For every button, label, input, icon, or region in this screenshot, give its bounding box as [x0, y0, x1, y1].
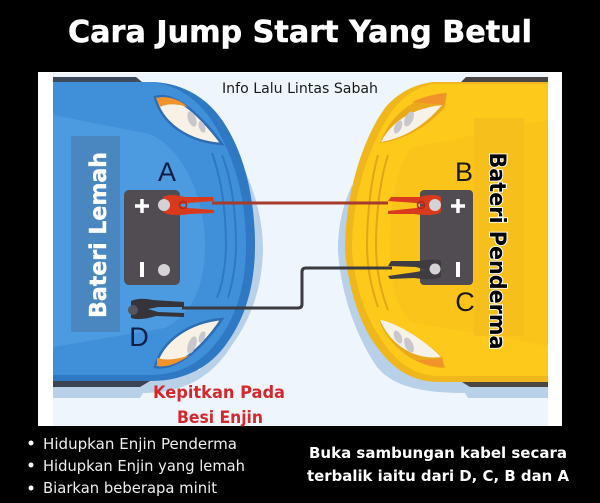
- disconnect note: terbalik iaitu dari D, C, B dan A: [307, 467, 569, 485]
- label: Bateri Penderma: Bateri Penderma: [484, 152, 509, 350]
- callout: clamp on engine metal: [153, 383, 285, 428]
- label: C: C: [455, 287, 475, 317]
- credit: Info Lalu Lintas Sabah: [222, 81, 378, 97]
- yellow car: donor battery: [338, 77, 548, 398]
- steps list: Hidupkan Enjin Penderma: [43, 435, 237, 453]
- label: Bateri Lemah: Bateri Lemah: [86, 152, 112, 318]
- clip B: red: [388, 195, 441, 215]
- icon: lower headlight: [155, 319, 222, 367]
- panel: diagram: [38, 72, 562, 428]
- icon: upper headlight: [380, 93, 447, 143]
- panel strip behind label: [71, 136, 120, 332]
- label: D: D: [129, 322, 149, 352]
- clip A: red: [158, 195, 214, 215]
- disconnect note: [307, 444, 569, 485]
- clip C: black: [388, 260, 441, 279]
- black cable: [182, 268, 392, 308]
- label: A: A: [158, 157, 176, 187]
- blue car: weak battery: [53, 77, 263, 398]
- icon: lower headlight: [379, 320, 445, 368]
- battery: donor: [420, 190, 473, 285]
- disconnect note: Buka sambungan kabel secara: [309, 444, 567, 462]
- panel strip behind label: [474, 118, 524, 336]
- clip D: black: [128, 299, 184, 319]
- battery: weak: [124, 190, 180, 285]
- icon: upper headlight: [155, 96, 222, 144]
- callout: clamp on engine metal: Besi Enjin: [177, 408, 263, 428]
- steps list: Hidupkan Enjin yang lemah: [43, 457, 245, 475]
- steps list: Biarkan beberapa minit: [43, 479, 217, 497]
- callout: clamp on engine metal: Kepitkan Pada: [153, 383, 285, 403]
- steps list: [28, 435, 245, 497]
- title: Cara Jump Start Yang Betul: [68, 15, 532, 50]
- label: B: B: [455, 157, 473, 187]
- red cable: [212, 202, 388, 204]
